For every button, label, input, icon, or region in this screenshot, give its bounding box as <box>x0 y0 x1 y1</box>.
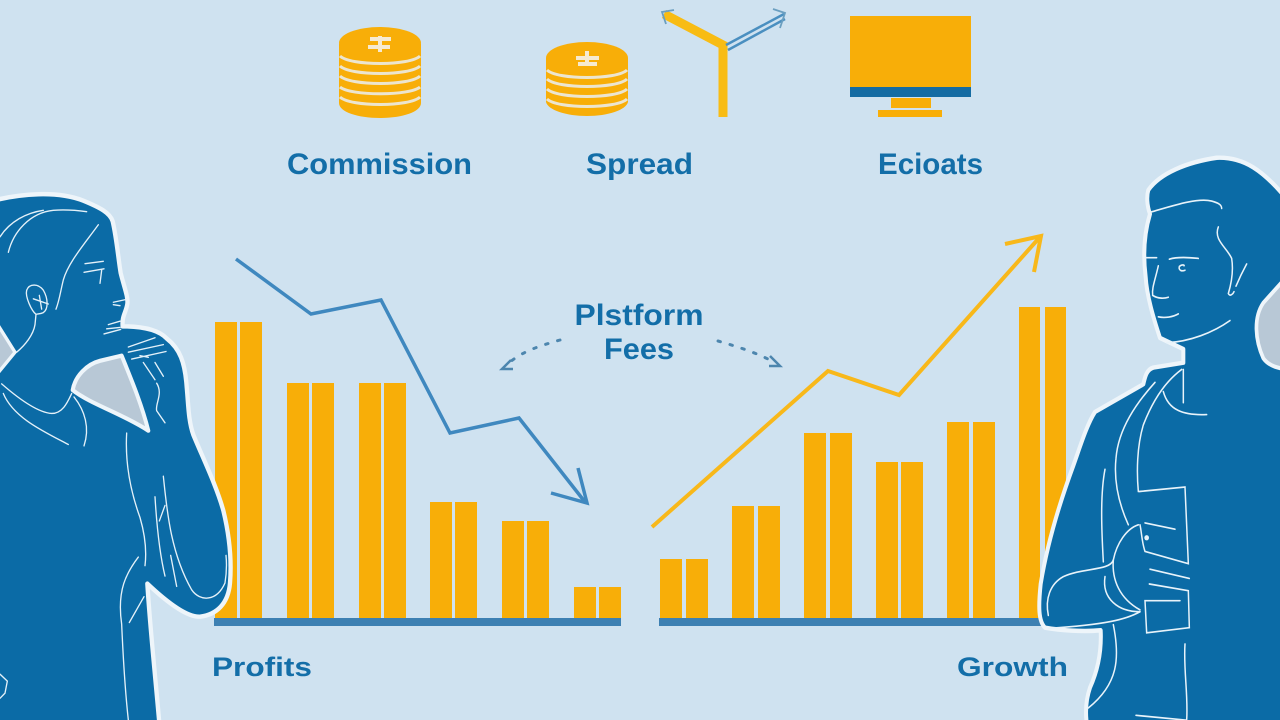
dotted arrow: left <box>502 340 560 369</box>
face and clothing line work <box>1047 200 1247 720</box>
center heading: platform fees: Fees <box>604 333 674 366</box>
bar chart: growth rising <box>659 307 1066 626</box>
center heading: platform fees: Plstform <box>574 299 704 332</box>
background gap behind neck <box>0 323 15 375</box>
bar chart: profits declining <box>214 322 621 626</box>
label: profits: Profits <box>212 652 312 682</box>
label: spread: Spread <box>586 148 693 181</box>
trend arrow: rising <box>652 236 1041 527</box>
icon: commission coin stack <box>339 27 421 118</box>
icon: monitor <box>850 16 971 117</box>
background gap behind shoulder <box>1256 270 1280 369</box>
icon: spread coin stack <box>546 42 628 116</box>
icon: forked arrows <box>662 9 785 117</box>
shoulder gap <box>73 356 148 431</box>
figure: confident person with phone <box>1039 158 1280 720</box>
face and body line work <box>0 210 226 720</box>
label: commission: Commission <box>287 148 472 181</box>
label: growth: Growth <box>957 652 1068 682</box>
trend arrow: falling <box>236 259 587 503</box>
phone dot <box>1144 535 1149 540</box>
figure: thinking person <box>0 194 231 720</box>
dotted arrow: right <box>718 341 780 366</box>
center heading: platform fees <box>574 299 704 366</box>
label: third category: Ecioats <box>878 148 983 181</box>
